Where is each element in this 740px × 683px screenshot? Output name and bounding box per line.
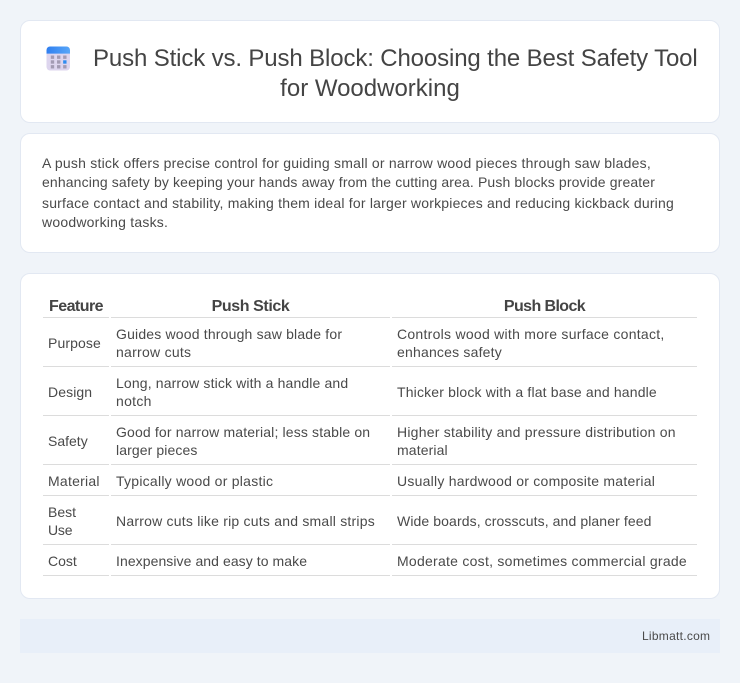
row: design: Thicker block with a flat base and handle [397, 384, 657, 400]
row: purpose: enhances safety [397, 344, 502, 360]
row: best use: Narrow cuts like rip cuts and small strips [116, 513, 375, 529]
row: purpose: Guides wood through saw blade for [116, 326, 342, 342]
icon: calendar [46, 46, 70, 70]
row: purpose: Controls wood with more surface contact, [397, 326, 665, 342]
row: design: Long, narrow stick with a handle and [116, 375, 348, 391]
comparison table [43, 298, 697, 576]
row: safety: Higher stability and pressure distribution on [397, 424, 676, 440]
row: cost: Cost [48, 553, 77, 569]
panel: title card [20, 20, 720, 123]
footer bar [20, 619, 720, 653]
row: material: Material [48, 473, 100, 489]
title: Push Stick vs. Push Block: Choosing the Best Safety Tool [93, 45, 698, 72]
row: best use: Wide boards, crosscuts, and planer feed [397, 513, 651, 529]
row: safety [48, 424, 676, 458]
panel: intro text: A push stick offers precise control for guiding small or narrow wood pieces through saw blades, [42, 155, 651, 171]
footer text: Libmatt.com [642, 629, 710, 643]
row: material: Usually hardwood or composite material [397, 473, 655, 489]
row: best use [48, 504, 651, 538]
row: safety: material [397, 442, 448, 458]
table header [49, 298, 586, 315]
table header: Push Block [504, 298, 585, 315]
panel: intro text [20, 133, 720, 253]
row: material [48, 473, 655, 489]
title [93, 45, 698, 102]
title: for Woodworking [280, 75, 460, 102]
row: design [48, 375, 657, 409]
row: safety: larger pieces [116, 442, 197, 458]
row: cost: Moderate cost, sometimes commercial grade [397, 553, 687, 569]
row: design: notch [116, 393, 152, 409]
table header: Feature [49, 298, 103, 315]
row: design: Design [48, 384, 92, 400]
table header: Push Stick [212, 298, 289, 315]
row: purpose: narrow cuts [116, 344, 191, 360]
row: purpose [48, 326, 665, 360]
panel: intro text: enhancing safety by keeping your hands away from the cutting area. Push blocks provide greater [42, 174, 655, 190]
row: safety: Good for narrow material; less stable on [116, 424, 370, 440]
row: best use: Best [48, 504, 76, 520]
panel: intro text: woodworking tasks. [42, 214, 168, 230]
row: purpose: Purpose [48, 335, 101, 351]
panel: intro text: surface contact and stability, making them ideal for larger workpieces and reducing kickback during [42, 195, 674, 211]
row: best use: Use [48, 522, 72, 538]
row: cost: Inexpensive and easy to make [116, 553, 307, 569]
row: cost [48, 553, 687, 569]
panel: comparison table [20, 273, 720, 599]
row: material: Typically wood or plastic [116, 473, 273, 489]
row: safety: Safety [48, 433, 88, 449]
